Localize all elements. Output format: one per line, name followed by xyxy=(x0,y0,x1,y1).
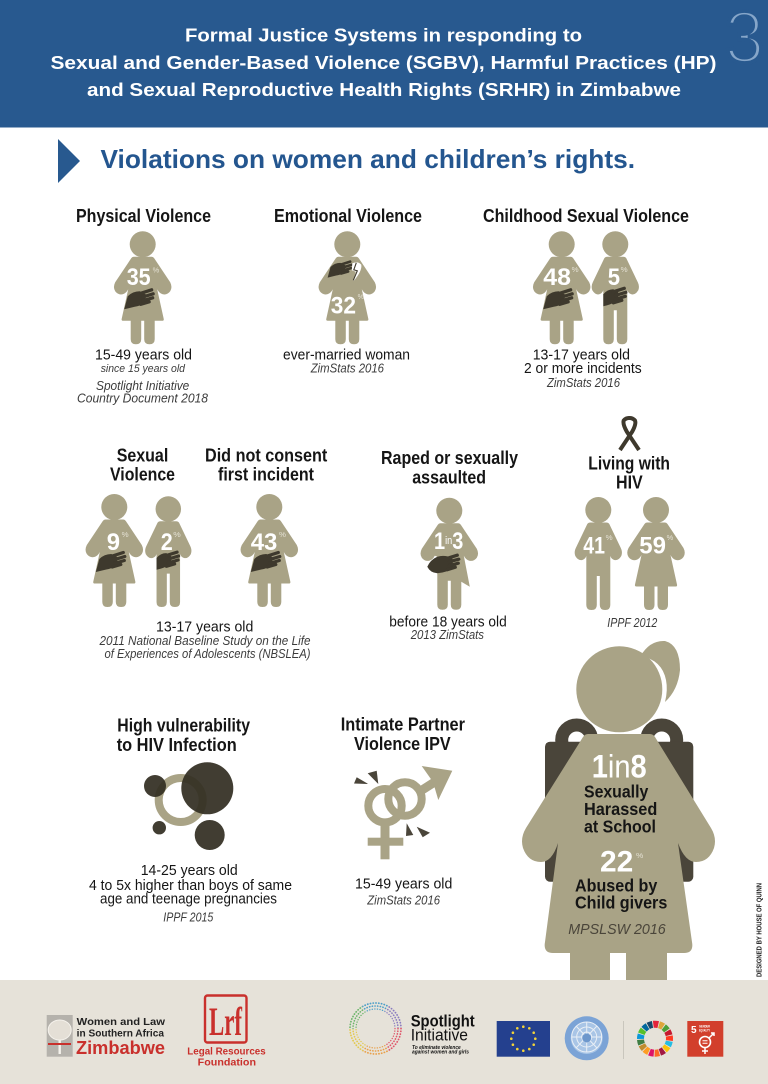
stat: 1 in 3: in xyxy=(445,535,452,547)
heading: did not consent xyxy=(205,446,327,485)
figure: girl 48% xyxy=(533,231,590,344)
source: MPSLSW 2016: MPSLSW 2016 xyxy=(568,921,666,938)
section arrow xyxy=(58,139,80,183)
designer credit: DESIGNED BY HOUSE OF QUINN xyxy=(756,883,764,977)
figure: boy 5% xyxy=(592,231,639,344)
caption: high vulnerability: IPPF 2015 xyxy=(163,911,213,925)
heading: living with HIV xyxy=(588,453,670,493)
stat: 9%: % xyxy=(122,532,129,539)
caption: childhood sexual violence xyxy=(524,347,642,390)
logo: Women and Law in Southern Africa Zimbabwe: Zimbabwe xyxy=(76,1038,165,1058)
logo: SDG 5 gender equality: 5 xyxy=(691,1025,697,1036)
figure: schoolgirl xyxy=(522,641,715,985)
caption: intimate partner violence xyxy=(355,876,452,907)
caption: sexual violence xyxy=(99,620,311,661)
stat: 35%: 35 xyxy=(127,264,151,291)
caption: high vulnerability xyxy=(89,863,292,925)
heading: high vulnerability xyxy=(117,716,250,755)
text: sexually harassed at school: Harassed xyxy=(584,799,657,819)
heading: intimate partner violence: Violence IPV xyxy=(354,734,451,754)
stat: 43%: 43 xyxy=(251,529,277,556)
panel: living with HIV xyxy=(575,418,685,630)
icon: spotlight dotted ring xyxy=(354,1006,398,1050)
stat: 9%: 9 xyxy=(107,529,120,556)
logo: Women and Law in Southern Africa Zimbabwe: Women and Law xyxy=(77,1016,166,1028)
panel: childhood sexual violence xyxy=(483,206,689,390)
logo: SDG 5 gender equality: GENDER xyxy=(699,1024,710,1028)
stat: 2% xyxy=(161,529,181,556)
panel: raped or sexually assaulted xyxy=(381,448,518,642)
logo: SDG wheel xyxy=(639,1023,671,1054)
logo: Legal Resources Foundation xyxy=(187,996,266,1069)
text: sexually harassed at school xyxy=(584,782,657,837)
figure: girl 9% xyxy=(86,494,143,607)
logo: SDG 5 gender equality xyxy=(687,1021,723,1057)
caption: emotional violence xyxy=(283,347,410,376)
figure: woman 35% xyxy=(114,231,171,344)
caption: emotional violence: ZimStats 2016 xyxy=(310,362,384,376)
panel: high vulnerability to HIV xyxy=(89,716,292,925)
text: abused by child givers: Child givers xyxy=(575,892,668,912)
heading: childhood sexual violence: Childhood Sexual Violence xyxy=(483,206,689,226)
section heading: Violations on women and children’s rights. xyxy=(100,144,635,174)
figure: boy 2% xyxy=(145,496,191,607)
stat: 1 in 3: 3 xyxy=(452,528,463,555)
text: sexually harassed at school: Sexually xyxy=(584,782,649,802)
panel: schoolgirl with backpack xyxy=(522,641,715,985)
logo: SDG 5 gender equality: EQUALITY xyxy=(699,1028,710,1032)
caption: high vulnerability: 14-25 years old xyxy=(141,863,238,879)
figure: girl in torn dress xyxy=(421,498,478,610)
caption: emotional violence: ever-married woman xyxy=(283,347,410,363)
caption: intimate partner violence: ZimStats 2016 xyxy=(366,893,440,907)
heading: raped or sexually assaulted: assaulted xyxy=(412,467,486,487)
banner title xyxy=(50,25,716,100)
heading: high vulnerability: to HIV Infection xyxy=(117,735,237,755)
banner title: Sexual and Gender-Based Violence (SGBV), Harmful Practices (HP) xyxy=(50,52,716,73)
spotlight wordmark: To eliminate violence xyxy=(412,1045,461,1051)
heading: living with HIV: Living with xyxy=(588,453,670,473)
spotlight wordmark: Spotlight xyxy=(411,1012,475,1031)
caption: childhood sexual violence: ZimStats 2016 xyxy=(546,376,620,390)
stat: 59%: % xyxy=(667,535,673,542)
icon: awareness ribbon xyxy=(620,418,639,450)
caption: high vulnerability: 4 to 5x higher than boys of same xyxy=(89,878,292,894)
heading: intimate partner violence xyxy=(341,715,465,754)
heading: high vulnerability: High vulnerability xyxy=(117,716,250,736)
stat: 35%: % xyxy=(153,268,159,274)
stat: 43%: % xyxy=(279,532,286,539)
icon: virus circles xyxy=(144,762,233,850)
caption: sexual violence: 2011 National Baseline Study on the Life xyxy=(99,634,311,648)
icon: interlocked gender symbols xyxy=(354,766,452,859)
stat: 9% xyxy=(107,529,129,556)
stat: 2%: % xyxy=(173,532,181,539)
caption: physical violence xyxy=(77,347,208,406)
heading: living with HIV: HIV xyxy=(616,473,643,493)
logo: Women and Law in Southern Africa Zimbabwe: in Southern Africa xyxy=(77,1029,164,1040)
heading: emotional violence: Emotional Violence xyxy=(274,206,422,226)
logo: EU flag xyxy=(497,1021,550,1057)
caption: raped or sexually assaulted: 2013 ZimStats xyxy=(410,628,484,642)
spotlight wordmark: against women and girls xyxy=(412,1050,469,1056)
source: IPPF 2012: IPPF 2012 xyxy=(607,616,657,630)
stat: 5%: 5 xyxy=(608,264,620,291)
stat: 41%: 41 xyxy=(583,532,605,559)
stat: 59%: 59 xyxy=(639,532,666,559)
logo: Spotlight Initiative xyxy=(354,1006,475,1056)
panel: physical violence xyxy=(76,206,211,406)
caption: sexual violence: 13-17 years old xyxy=(156,620,253,636)
stat: 48%: 48 xyxy=(543,264,571,291)
header banner xyxy=(0,0,768,128)
stat: 2%: 2 xyxy=(161,529,173,556)
caption: physical violence: Spotlight Initiative xyxy=(96,379,189,393)
heading: intimate partner violence: Intimate Partner xyxy=(341,715,465,735)
figure: girl 59% xyxy=(627,497,685,610)
caption: sexual violence: of Experiences of Adolescents (NBSLEA) xyxy=(104,647,310,661)
icon: backpack xyxy=(545,725,693,882)
caption: physical violence: 15-49 years old xyxy=(95,347,192,363)
caption: high vulnerability: age and teenage pregnancies xyxy=(100,891,277,907)
stat: 5% xyxy=(608,264,628,291)
figure: girl 43% xyxy=(241,494,298,607)
stat: 5%: % xyxy=(621,267,628,274)
heading: raped or sexually assaulted xyxy=(381,448,518,487)
divider xyxy=(623,1021,624,1059)
logo: Legal Resources Foundation: Lrf xyxy=(209,999,242,1044)
caption: childhood sexual violence: 2 or more incidents xyxy=(524,361,642,377)
footer band xyxy=(0,980,768,1084)
stat: 32%: 32 xyxy=(331,292,356,319)
stat: 1 in 8: 1in8 xyxy=(592,749,647,785)
caption: childhood sexual violence: 13-17 years old xyxy=(533,347,630,363)
logo: Women and Law in Southern Africa Zimbabwe xyxy=(47,1015,166,1058)
panel: sexual violence and consent xyxy=(86,446,327,661)
panel: emotional violence xyxy=(274,206,422,376)
stat: 48%: % xyxy=(572,267,579,274)
caption: physical violence: since 15 years old xyxy=(101,363,186,375)
figure: woman 32% with broken heart xyxy=(319,231,376,344)
heading: sexual violence: Sexual xyxy=(117,446,168,466)
text: sexually harassed at school: at School xyxy=(584,817,656,837)
heading: sexual violence: Violence xyxy=(110,465,175,485)
caption: raped or sexually assaulted xyxy=(389,615,507,642)
caption: physical violence: Country Document 2018 xyxy=(77,392,208,406)
logo: Legal Resources Foundation: Legal Resources xyxy=(187,1045,266,1057)
caption: intimate partner violence: 15-49 years old xyxy=(355,876,452,892)
logo: Legal Resources Foundation: Foundation xyxy=(198,1057,256,1069)
text: abused by child givers: Abused by xyxy=(575,876,658,896)
stat: 32%: % xyxy=(358,294,364,301)
banner title: and Sexual Reproductive Health Rights (SRHR) in Zimbabwe xyxy=(87,79,681,100)
stat: 22%: 22 xyxy=(600,846,633,879)
caption: raped or sexually assaulted: before 18 years old xyxy=(389,615,507,631)
heading: sexual violence xyxy=(110,446,175,485)
heading: did not consent: Did not consent xyxy=(205,446,327,466)
spotlight wordmark xyxy=(411,1012,475,1056)
heading: did not consent: first incident xyxy=(218,465,314,485)
banner title: Formal Justice Systems in responding to xyxy=(185,25,582,46)
heading: physical violence: Physical Violence xyxy=(76,206,211,226)
panel: intimate partner violence xyxy=(341,715,465,907)
figure: boy 41% xyxy=(575,497,622,610)
text: abused by child givers xyxy=(575,876,668,912)
stat: 1 in 3: 1 xyxy=(434,528,447,555)
stat: 41%: % xyxy=(606,535,613,542)
stat: 22%: % xyxy=(636,853,643,860)
heading: raped or sexually assaulted: Raped or sexually xyxy=(381,448,518,468)
spotlight wordmark: Initiative xyxy=(411,1026,468,1045)
logo: UN emblem xyxy=(565,1016,609,1060)
